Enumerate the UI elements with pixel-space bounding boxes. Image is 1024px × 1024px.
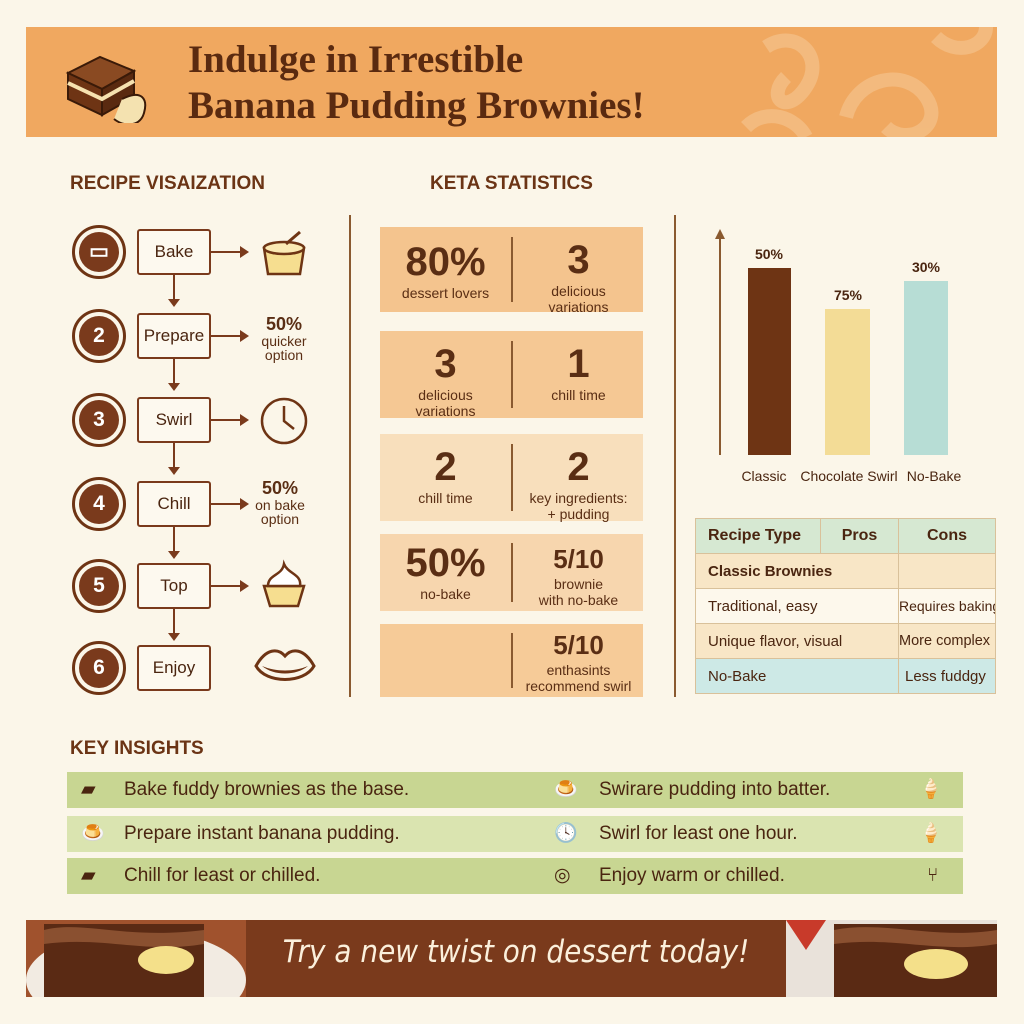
panel: recipe steps: option bbox=[261, 511, 299, 527]
panel: key statistics: key ingredients: bbox=[529, 490, 628, 506]
panel: key statistics: delicious bbox=[551, 283, 606, 299]
photo: brownie left bbox=[26, 920, 246, 997]
bar chart: Classic bbox=[741, 468, 787, 484]
panel: recipe steps: 50% bbox=[266, 314, 302, 334]
header banner bbox=[26, 27, 997, 137]
panel: recipe steps: Prepare bbox=[144, 326, 204, 345]
panel: recipe steps: 5 bbox=[93, 574, 105, 597]
comparison table: Unique flavor, visual bbox=[708, 632, 842, 650]
panel: recipe steps: option bbox=[265, 347, 303, 363]
panel: key statistics: + pudding bbox=[548, 506, 609, 522]
icon: whipped topping bbox=[262, 560, 306, 608]
icon: brownie bbox=[66, 56, 146, 123]
panel: insights list: ▰ bbox=[81, 865, 96, 886]
panel: recipe steps: 4 bbox=[93, 492, 105, 515]
panel: recipe steps: Enjoy bbox=[153, 658, 195, 677]
panel: key statistics: variations bbox=[416, 403, 475, 419]
comparison table: Classic Brownies bbox=[708, 562, 832, 580]
panel: key statistics: enthasints bbox=[547, 662, 610, 678]
panel: insights list: ◎ bbox=[554, 865, 571, 886]
panel: key statistics: 50% bbox=[405, 541, 486, 585]
bar chart: 30% bbox=[912, 259, 941, 275]
heading: key insights: KEY INSIGHTS bbox=[70, 738, 204, 759]
title bbox=[188, 38, 645, 127]
panel: insights list: 🍮 bbox=[81, 823, 105, 844]
comparison table bbox=[695, 518, 996, 694]
panel: key statistics: chill time bbox=[418, 490, 473, 506]
panel: recipe steps: Bake bbox=[155, 242, 193, 261]
panel: recipe steps bbox=[72, 225, 316, 695]
panel: key statistics: 3 bbox=[567, 238, 590, 282]
panel: recipe steps: 2 bbox=[93, 324, 105, 347]
panel: key statistics: 2 bbox=[434, 445, 457, 489]
panel: insights list: 🍦 bbox=[919, 823, 943, 844]
heading: key statistics: KETA STATISTICS bbox=[430, 173, 593, 194]
panel: key statistics: with no-bake bbox=[539, 592, 618, 608]
bar chart: 50% bbox=[755, 246, 784, 262]
panel: key statistics: recommend swirl bbox=[526, 678, 631, 694]
panel: insights list: ▰ bbox=[81, 779, 96, 800]
panel: insights list: 🕓 bbox=[554, 823, 578, 844]
panel: key statistics: 2 bbox=[567, 445, 590, 489]
comparison table: Recipe Type bbox=[708, 527, 801, 544]
panel: key statistics: 1 bbox=[567, 342, 590, 386]
panel: recipe steps: 50% bbox=[262, 478, 298, 498]
panel: insights list: ⑂ bbox=[927, 865, 938, 886]
panel: insights list: 🍮 bbox=[554, 779, 578, 800]
panel: insights list bbox=[67, 772, 963, 894]
panel: key statistics: no-bake bbox=[420, 586, 471, 602]
icon: pudding bbox=[262, 230, 306, 276]
bar chart: 75% bbox=[834, 287, 863, 303]
bar chart: No-Bake bbox=[907, 468, 961, 484]
comparison table: Pros bbox=[842, 527, 877, 544]
panel: insights list: Chill for least or chilled. bbox=[124, 865, 320, 886]
panel: recipe steps: on bake bbox=[255, 497, 305, 513]
panel: key statistics: chill time bbox=[551, 387, 606, 403]
comparison table: No-Bake bbox=[708, 668, 766, 684]
panel: recipe steps: 3 bbox=[93, 408, 105, 431]
title: Banana Pudding Brownies! bbox=[188, 84, 645, 127]
panel: insights list: Prepare instant banana pudding. bbox=[124, 823, 400, 844]
panel: insights list: Enjoy warm or chilled. bbox=[599, 865, 785, 886]
comparison table: Traditional, easy bbox=[708, 598, 818, 614]
panel: insights list: Swirl for least one hour. bbox=[599, 823, 798, 844]
panel: key statistics: variations bbox=[549, 299, 608, 315]
panel: recipe steps: Chill bbox=[157, 494, 191, 513]
tagline: Try a new twist on dessert today! bbox=[283, 934, 749, 970]
panel: insights list: 🍦 bbox=[919, 779, 943, 800]
panel: key statistics: 5/10 bbox=[553, 630, 604, 660]
panel: key statistics: 5/10 bbox=[553, 544, 604, 574]
footer banner bbox=[26, 920, 997, 997]
comparison table: Less fuddgy bbox=[905, 668, 986, 684]
panel: key statistics: 80% bbox=[405, 240, 486, 284]
panel: key statistics: dessert lovers bbox=[402, 285, 489, 301]
heading: recipe visualization: RECIPE VISAIZATION bbox=[70, 173, 265, 194]
panel: insights list: Bake fuddy brownies as the base. bbox=[124, 779, 409, 800]
comparison table: Cons bbox=[927, 527, 967, 544]
panel: recipe steps: 6 bbox=[93, 656, 105, 679]
panel: key statistics: 3 bbox=[434, 342, 457, 386]
bar chart bbox=[715, 229, 961, 484]
title: Indulge in Irrestible bbox=[188, 38, 523, 81]
panel: key statistics bbox=[380, 227, 643, 697]
panel: key statistics: delicious bbox=[418, 387, 473, 403]
comparison table: More complex bbox=[899, 633, 990, 649]
panel: key statistics: brownie bbox=[554, 576, 603, 592]
panel: insights list: Swirare pudding into batter. bbox=[599, 779, 830, 800]
icon: clock bbox=[260, 398, 308, 444]
bar chart: Chocolate Swirl bbox=[800, 468, 898, 484]
panel: recipe steps: ▭ bbox=[89, 240, 109, 263]
panel: recipe steps: quicker bbox=[261, 333, 307, 349]
panel: recipe steps: Swirl bbox=[156, 410, 192, 429]
photo: brownie right bbox=[786, 920, 997, 997]
panel: recipe steps: Top bbox=[160, 576, 188, 595]
decorative swirls bbox=[741, 27, 993, 137]
icon: lips bbox=[254, 649, 316, 681]
